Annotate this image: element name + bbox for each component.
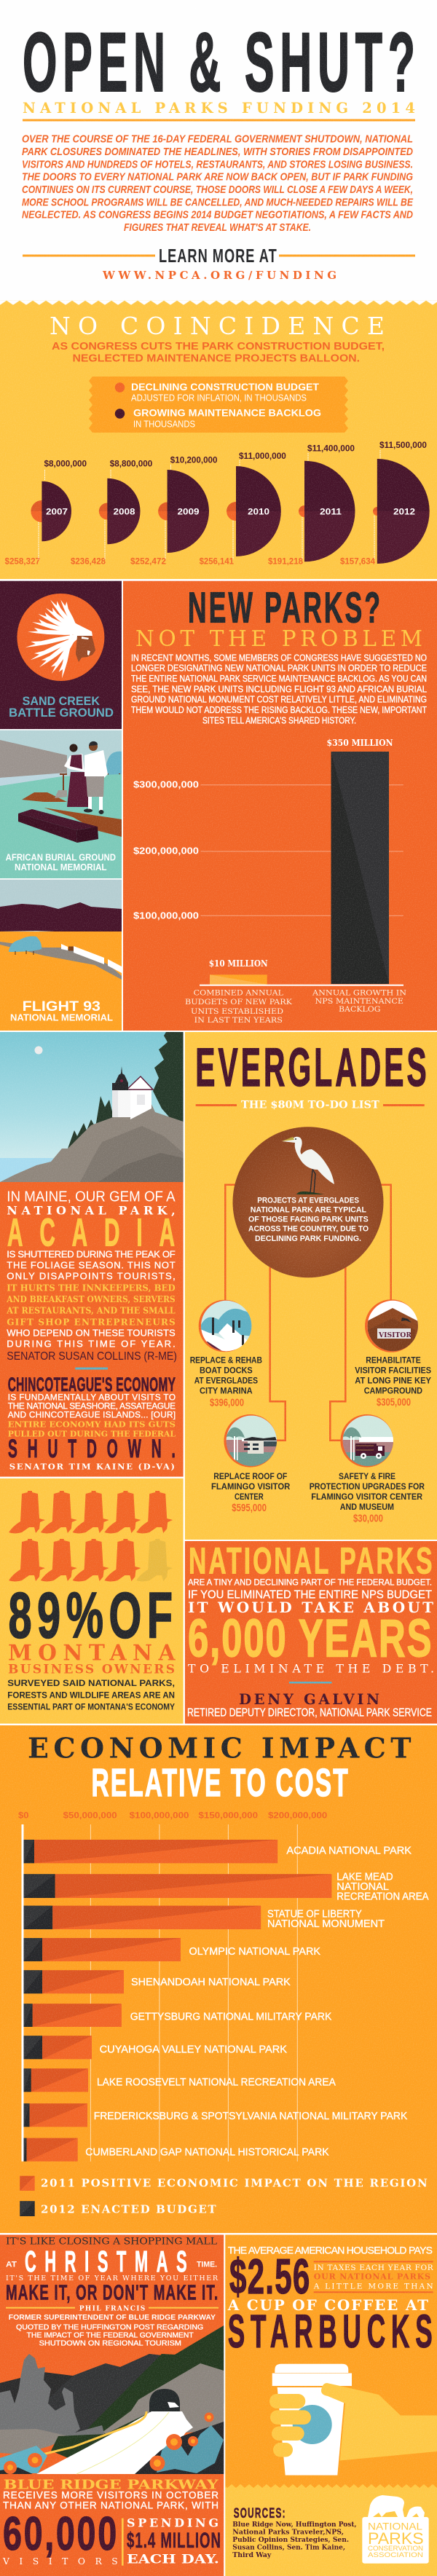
quote: phil francis: CHRISTMAS bbox=[25, 2245, 187, 2278]
quote: phil francis: THE IMPACT OF THE FEDERAL GOVERNMENT bbox=[27, 2331, 194, 2339]
quote: tim kaine: CHINCOTEAGUE'S ECONOMY bbox=[8, 1374, 176, 1395]
backlog value labels: $11,400,000 bbox=[307, 445, 355, 454]
caption left: BUDGETS OF NEW PARK bbox=[185, 998, 292, 1007]
panel: acadia scene bbox=[0, 1032, 184, 1182]
legend bbox=[20, 2176, 428, 2216]
illustration: tunnel road bbox=[0, 2325, 224, 2474]
memorial wall bbox=[61, 944, 122, 973]
project: roof bbox=[211, 1473, 291, 1514]
label bbox=[6, 853, 116, 873]
survey text: SURVEYED SAID NATIONAL PARKS, bbox=[7, 1679, 175, 1688]
budget value labels: $256,141 bbox=[200, 558, 235, 567]
legend ribbon bbox=[89, 377, 348, 433]
gridlines and axis labels bbox=[133, 779, 403, 921]
project: marina: AT EVERGLADES bbox=[194, 1377, 258, 1386]
bar: shenandoah bbox=[23, 1970, 291, 1993]
caption left bbox=[185, 989, 292, 1025]
legend ribbon: IN THOUSANDS bbox=[133, 420, 195, 430]
project: visitor facilities bbox=[355, 1357, 431, 1409]
panel: montana bbox=[0, 1478, 184, 1724]
panel: debt: TO ELIMINATE THE DEBT. bbox=[188, 1662, 434, 1676]
bar: acadia: ACADIA NATIONAL PARK bbox=[286, 1846, 412, 1857]
year labels: 2012 bbox=[393, 507, 415, 517]
project: marina bbox=[190, 1357, 262, 1409]
bar: gettysburg: GETTYSBURG NATIONAL MILITARY PARK bbox=[130, 2011, 332, 2022]
heading: EVERGLADES bbox=[195, 1037, 427, 1098]
axis labels: $50,000,000 bbox=[63, 1811, 117, 1821]
bar: statue of liberty: NATIONAL MONUMENT bbox=[267, 1918, 385, 1930]
quote: phil francis: QUOTED BY THE HUFFINGTON POST REGARDING bbox=[16, 2323, 204, 2331]
body text bbox=[131, 653, 427, 725]
starbucks word: STARBUCKS bbox=[228, 2305, 433, 2358]
quote: susan collins: AND BREAKFAST OWNERS, SERVERS bbox=[6, 1294, 176, 1304]
price note: A LITTLE MORE THAN bbox=[313, 2282, 433, 2291]
bar: statue of liberty: STATUE OF LIBERTY bbox=[267, 1909, 362, 1921]
blue ridge stats: THAN ANY OTHER NATIONAL PARK, WITH bbox=[3, 2500, 219, 2510]
price note: OUR NATIONAL PARKS bbox=[314, 2272, 430, 2281]
bar: lake mead: NATIONAL bbox=[336, 1881, 389, 1893]
water bbox=[0, 1158, 73, 1182]
circle text: PROJECTS AT EVERGLADES bbox=[257, 1197, 359, 1205]
lighthouse bbox=[112, 1066, 153, 1119]
road bbox=[0, 942, 122, 980]
connectors bbox=[225, 1185, 391, 1441]
project: roof: REPLACE ROOF OF bbox=[213, 1473, 287, 1481]
panel: sand creek bbox=[0, 581, 122, 729]
roadside plants left bbox=[0, 2446, 47, 2474]
panel: debt bbox=[185, 1541, 437, 1724]
section: no coincidence bbox=[0, 301, 437, 579]
business owners: BUSINESS OWNERS bbox=[8, 1662, 175, 1677]
project: visitor facilities: VISITOR FACILITIES bbox=[355, 1367, 431, 1376]
subtitle: NATIONAL PARKS FUNDING 2014 bbox=[23, 100, 415, 117]
project: marina: REPLACE & REHAB bbox=[190, 1357, 262, 1366]
quote: susan collins bbox=[6, 1189, 177, 1363]
panel: sources and logo bbox=[225, 2484, 437, 2576]
subheading: THE $80M TO-DO LIST bbox=[241, 1100, 379, 1111]
shovel bbox=[55, 774, 67, 798]
bar: fredericksburg: FREDERICKSBURG & SPOTSYLVANIA NATIONAL MILITARY PARK bbox=[94, 2111, 408, 2122]
quote: phil francis: AT bbox=[6, 2260, 17, 2269]
bar: statue of liberty bbox=[23, 1906, 385, 1930]
subheading: RELATIVE TO COST bbox=[92, 1760, 348, 1805]
quote: susan collins: IT HURTS THE INNKEEPERS, BED bbox=[7, 1283, 176, 1293]
panel: flight 93 bbox=[0, 880, 122, 1031]
sources: Blue Ridge Now, Huffington Post, bbox=[232, 2521, 357, 2529]
bar: cuyahoga bbox=[23, 2036, 287, 2059]
sources bbox=[232, 2505, 357, 2559]
main circle bbox=[233, 1127, 383, 1277]
survey text: FORESTS AND WILDLIFE AREAS ARE AN bbox=[7, 1691, 175, 1700]
heading: NATIONAL PARKS bbox=[189, 1541, 433, 1582]
rocks bbox=[0, 1103, 184, 1182]
quote: tim kaine: IS FUNDAMENTALLY ABOUT VISITS TO bbox=[8, 1392, 176, 1402]
quote: susan collins: DURING THIS TIME OF YEAR. bbox=[7, 1338, 176, 1349]
icon: fire truck bbox=[340, 1414, 395, 1468]
caption left: UNITS ESTABLISHED bbox=[191, 1007, 283, 1016]
panel: new parks bbox=[123, 581, 437, 1031]
logo: national parks conservation association bbox=[362, 2495, 429, 2564]
icon: visitor center: VISITOR bbox=[378, 1331, 412, 1339]
legend ribbon: DECLINING CONSTRUCTION BUDGET bbox=[131, 382, 320, 393]
project: fire safety: PROTECTION UPGRADES FOR bbox=[310, 1483, 425, 1492]
backlog bar: $350 MILLION bbox=[326, 737, 393, 748]
project: fire safety: FLAMINGO VISITOR CENTER bbox=[311, 1493, 423, 1502]
panel: blue ridge parkway bbox=[0, 2234, 224, 2576]
quote: phil francis: IT'S THE TIME OF YEAR WHERE YOU EITHER bbox=[6, 2274, 219, 2282]
guardrail bbox=[18, 2411, 146, 2460]
new parks bar: $10 MILLION bbox=[209, 958, 268, 969]
quote: tim kaine: AND CHINCOTEAGUE ISLANDS... [OUR] bbox=[8, 1410, 176, 1420]
quote: susan collins: ONLY DISAPPOINTS TOURISTS, bbox=[7, 1271, 176, 1282]
quote: susan collins: IS SHUTTERED DURING THE PEAK OF bbox=[7, 1249, 176, 1260]
budget value labels: $258,327 bbox=[4, 558, 40, 567]
subtitle rule bbox=[23, 119, 415, 121]
backlog bar bbox=[326, 737, 393, 984]
attribution: DENY GALVIN bbox=[239, 1691, 379, 1708]
bar: cumberland gap bbox=[23, 2138, 329, 2162]
quote: tim kaine: SENATOR TIM KAINE (D-VA) bbox=[9, 1461, 175, 1471]
quote: tim kaine: THE NATIONAL SEASHORE, ASSATEAGUE bbox=[8, 1401, 176, 1411]
legend: 2011 POSITIVE ECONOMIC IMPACT ON THE REGION bbox=[41, 2176, 428, 2189]
year labels: 2009 bbox=[178, 507, 200, 517]
quote: susan collins: GIFT SHOP ENTREPRENEURS bbox=[7, 1317, 176, 1328]
big percentage: 89%OF bbox=[9, 1579, 173, 1651]
year labels: 2011 bbox=[320, 507, 342, 517]
label: AFRICAN BURIAL GROUND bbox=[6, 853, 116, 863]
icon: egret bbox=[282, 1137, 334, 1194]
project: roof: CENTER bbox=[235, 1493, 264, 1502]
quote: phil francis: TIME. bbox=[197, 2260, 217, 2269]
budget value labels: $157,634 bbox=[340, 558, 376, 567]
axis labels: $200,000,000 bbox=[268, 1811, 328, 1821]
backlog value labels bbox=[44, 441, 427, 469]
subheading: NOT THE PROBLEM bbox=[135, 626, 422, 651]
label bbox=[9, 694, 114, 720]
label: BATTLE GROUND bbox=[9, 706, 114, 720]
quote: susan collins: IN MAINE, OUR GEM OF A bbox=[7, 1189, 176, 1205]
circle text: OF THOSE FACING PARK UNITS bbox=[248, 1216, 369, 1224]
maintenance backlog half circles bbox=[42, 459, 430, 564]
budget value labels: $252,472 bbox=[130, 558, 166, 567]
gridlines and axis labels: $300,000,000 bbox=[133, 779, 199, 790]
project: visitor facilities: AT LONG PINE KEY bbox=[355, 1377, 431, 1386]
axis labels: $0 bbox=[18, 1811, 29, 1821]
quote: phil francis: PHIL FRANCIS bbox=[79, 2305, 145, 2312]
project: marina: CITY MARINA bbox=[200, 1387, 253, 1396]
bar: olympic: OLYMPIC NATIONAL PARK bbox=[189, 1946, 320, 1958]
legend ribbon: ADJUSTED FOR INFLATION, IN THOUSANDS bbox=[131, 393, 307, 403]
label: NATIONAL MEMORIAL bbox=[10, 1012, 113, 1023]
budget value labels bbox=[4, 558, 376, 567]
price note: IN TAXES EACH YEAR FOR bbox=[314, 2264, 434, 2272]
icon: native american chief bbox=[17, 594, 104, 681]
caption right: BACKLOG bbox=[339, 1005, 380, 1014]
body text: SITES TELL AMERICA'S SHARED HISTORY. bbox=[202, 715, 356, 725]
project: roof: FLAMINGO VISITOR bbox=[211, 1483, 291, 1492]
survey text: ESSENTIAL PART OF MONTANA'S ECONOMY bbox=[7, 1703, 175, 1712]
backlog value labels: $8,800,000 bbox=[110, 460, 152, 469]
tall tree bbox=[153, 1032, 184, 1122]
year labels: 2007 bbox=[46, 507, 68, 517]
new parks bar bbox=[209, 958, 268, 985]
logo: national parks conservation association: PARKS bbox=[368, 2529, 424, 2548]
bar: lake mead bbox=[23, 1872, 429, 1902]
icon: flamingo visitor center roof bbox=[224, 1414, 278, 1468]
logo: national parks conservation association: ASSOCIATION bbox=[368, 2551, 423, 2559]
logo: national parks conservation association: NATIONAL bbox=[368, 2521, 422, 2532]
blue ridge stats: SPENDING bbox=[127, 2516, 219, 2529]
trees bbox=[0, 2354, 80, 2440]
backlog value labels: $11,500,000 bbox=[379, 441, 427, 450]
intro line: THE AVERAGE AMERICAN HOUSEHOLD PAYS bbox=[228, 2245, 433, 2256]
legend ribbon: GROWING MAINTENANCE BACKLOG bbox=[133, 408, 321, 419]
blue ridge stats bbox=[2, 2477, 221, 2567]
project: marina: BOAT DOCKS bbox=[200, 1367, 253, 1376]
caption left: IN LAST TEN YEARS bbox=[194, 1016, 283, 1025]
blue ridge stats: VISITORS bbox=[2, 2556, 118, 2567]
title: OPEN & SHUT? bbox=[23, 15, 415, 109]
blue ridge stats: RECEIVES MORE VISITORS IN OCTOBER bbox=[3, 2490, 219, 2501]
circle text: DECLINING PARK FUNDING. bbox=[255, 1234, 361, 1243]
caption right: ANNUAL GROWTH IN bbox=[312, 989, 406, 998]
quote: susan collins: ACADIA bbox=[7, 1211, 175, 1255]
budget value labels: $236,428 bbox=[71, 558, 106, 567]
backlog value labels: $8,000,000 bbox=[44, 460, 87, 469]
panel: acadia quote bbox=[0, 1182, 184, 1477]
axis labels bbox=[18, 1811, 328, 1821]
project: fire safety: AND MUSEUM bbox=[340, 1503, 394, 1512]
dirt mound bbox=[22, 792, 67, 802]
bar: lake mead: RECREATION AREA bbox=[336, 1891, 429, 1902]
small conifers bbox=[68, 1096, 114, 1149]
quote: phil francis bbox=[6, 2237, 219, 2348]
quote: tim kaine bbox=[8, 1374, 176, 1471]
label: SAND CREEK bbox=[23, 694, 101, 708]
bar: lake mead: LAKE MEAD bbox=[336, 1872, 393, 1883]
panel: african burial ground bbox=[0, 730, 122, 878]
bar: lake roosevelt: LAKE ROOSEVELT NATIONAL RECREATION AREA bbox=[97, 2076, 336, 2088]
axis labels: $150,000,000 bbox=[198, 1811, 258, 1821]
quote: tim kaine: ENTIRE ECONOMY HAD ITS GUTS bbox=[8, 1419, 176, 1430]
sources: Susan Collins, Sen. Tim Kaine, bbox=[232, 2544, 345, 2552]
panel: starbucks bbox=[225, 2234, 437, 2488]
roadside plants right bbox=[135, 2412, 224, 2474]
blue ridge stats: $1.4 MILLION bbox=[127, 2529, 221, 2553]
coffin bbox=[18, 809, 98, 843]
quote: phil francis: FORMER SUPERINTENDENT OF BLUE RIDGE PARKWAY bbox=[9, 2313, 216, 2322]
sources: Public Opinion Strategies, Sen. bbox=[232, 2536, 349, 2544]
icon: visitor center bbox=[365, 1299, 418, 1352]
backlog value labels: $10,200,000 bbox=[170, 456, 217, 465]
bar: gettysburg bbox=[23, 2004, 332, 2027]
blue ridge stats: BLUE RIDGE PARKWAY bbox=[4, 2477, 219, 2492]
heading: NO COINCIDENCE bbox=[50, 312, 385, 340]
heading: ECONOMIC IMPACT bbox=[28, 1731, 411, 1764]
legend: 2012 ENACTED BUDGET bbox=[41, 2202, 217, 2215]
half circle chart bbox=[4, 441, 430, 567]
project: roof: $595,000 bbox=[232, 1502, 267, 1514]
header section bbox=[22, 15, 415, 282]
body lines: ARE A TINY AND DECLINING PART OF THE FEDERAL BUDGET. bbox=[188, 1578, 432, 1588]
intro paragraph bbox=[22, 133, 414, 234]
bar: shenandoah: SHENANDOAH NATIONAL PARK bbox=[131, 1977, 291, 1988]
caption right bbox=[312, 989, 406, 1014]
axis labels: $100,000,000 bbox=[130, 1811, 189, 1821]
backlog value labels: $11,000,000 bbox=[239, 452, 286, 461]
price note bbox=[313, 2261, 434, 2293]
project: visitor facilities: REHABILITATE bbox=[366, 1357, 421, 1366]
circle text: ACROSS THE COUNTRY, DUE TO bbox=[248, 1225, 369, 1234]
construction budget circles bbox=[31, 500, 382, 522]
subheading bbox=[196, 1100, 425, 1111]
bar: fredericksburg bbox=[23, 2103, 408, 2127]
circle text bbox=[248, 1197, 369, 1243]
year labels: 2010 bbox=[248, 507, 269, 517]
horizontal bar chart bbox=[18, 1811, 429, 2162]
subheading: NEGLECTED MAINTENANCE PROJECTS BALLOON. bbox=[73, 353, 360, 365]
icon: hand holding coffee cup bbox=[269, 2364, 437, 2475]
project: marina: $396,000 bbox=[210, 1397, 244, 1409]
bar: olympic bbox=[23, 1938, 320, 1961]
quote: susan collins: THE FOLIAGE SEASON. THIS NOT bbox=[7, 1260, 176, 1271]
quote: phil francis: IT'S LIKE CLOSING A SHOPPING MALL bbox=[6, 2237, 217, 2248]
gridlines and axis labels: $100,000,000 bbox=[133, 910, 199, 921]
big price: $2.56 bbox=[229, 2249, 310, 2304]
project: fire safety bbox=[310, 1473, 425, 1524]
logo: national parks conservation association: CONSERVATION bbox=[368, 2545, 423, 2552]
bar: cuyahoga: CUYAHOGA VALLEY NATIONAL PARK bbox=[100, 2044, 287, 2055]
label: NATIONAL MEMORIAL bbox=[15, 862, 107, 873]
caption left: COMBINED ANNUAL bbox=[194, 989, 283, 998]
budget value labels: $191,218 bbox=[268, 558, 304, 567]
sources: National Parks Traveler,NPS, bbox=[232, 2528, 344, 2536]
panel: debt: IT WOULD TAKE ABOUT bbox=[188, 1599, 433, 1616]
heading: NEW PARKS? bbox=[188, 584, 380, 632]
quote: susan collins: AT RESTAURANTS, AND THE SMALL bbox=[6, 1306, 176, 1316]
learn more line: LEARN MORE AT bbox=[159, 245, 277, 267]
blue ridge stats: 60,000 bbox=[3, 2508, 117, 2561]
trees bbox=[9, 937, 42, 955]
coffee line: A CUP OF COFFEE AT bbox=[227, 2296, 428, 2314]
bar: lake roosevelt bbox=[23, 2068, 336, 2092]
sources: Third Way bbox=[232, 2551, 272, 2559]
quote: susan collins: NATIONAL PARK, bbox=[7, 1204, 176, 1218]
mourners bbox=[64, 741, 108, 814]
montana heading: MONTANA bbox=[8, 1639, 176, 1665]
bar chart bbox=[133, 737, 406, 1025]
leader lines bbox=[39, 450, 380, 559]
intro paragraph: FIGURES THAT REVEAL WHAT'S AT STAKE. bbox=[124, 221, 311, 234]
year labels bbox=[46, 507, 415, 517]
bar: cumberland gap: CUMBERLAND GAP NATIONAL HISTORICAL PARK bbox=[85, 2146, 329, 2158]
quote: phil francis: MAKE IT, OR DON'T MAKE IT. bbox=[6, 2281, 218, 2304]
sources: SOURCES: bbox=[234, 2505, 286, 2521]
survey text bbox=[7, 1679, 175, 1712]
subheading bbox=[52, 341, 385, 365]
caption right: NPS MAINTENANCE bbox=[315, 997, 403, 1006]
label bbox=[10, 999, 113, 1023]
url: WWW.NPCA.ORG/FUNDING bbox=[102, 269, 336, 282]
quote: tim kaine: PULLED OUT DURING THE FEDERAL bbox=[8, 1428, 176, 1438]
quote: susan collins: WHO DEPEND ON THESE TOURISTS bbox=[7, 1327, 176, 1338]
road bbox=[36, 2411, 193, 2474]
panel: everglades bbox=[185, 1032, 437, 1540]
quote: phil francis: SHUTDOWN ON REGIONAL TOURISM bbox=[39, 2340, 181, 2348]
panel: economic impact bbox=[0, 1725, 437, 2233]
gridlines and axis labels: $200,000,000 bbox=[133, 846, 199, 856]
quote: tim kaine: SHUTDOWN. bbox=[8, 1434, 176, 1463]
year labels: 2008 bbox=[114, 507, 135, 517]
big figure: 6,000 YEARS bbox=[188, 1609, 432, 1669]
project: visitor facilities: CAMPGROUND bbox=[364, 1387, 422, 1396]
project: fire safety: $30,000 bbox=[353, 1512, 383, 1524]
quote: susan collins: SENATOR SUSAN COLLINS (R-ME) bbox=[7, 1350, 177, 1363]
boots icon chart bbox=[9, 1491, 173, 1582]
moon bbox=[35, 1046, 42, 1055]
project: fire safety: SAFETY & FIRE bbox=[339, 1473, 395, 1481]
subheading: AS CONGRESS CUTS THE PARK CONSTRUCTION BUDGET, bbox=[52, 341, 385, 352]
circle text: NATIONAL PARK ARE TYPICAL bbox=[251, 1206, 366, 1215]
project: visitor facilities: $305,000 bbox=[377, 1396, 411, 1409]
icon: marina bbox=[198, 1299, 252, 1352]
blue ridge stats: EACH DAY. bbox=[127, 2552, 219, 2567]
learn more line bbox=[23, 245, 415, 267]
bar: acadia bbox=[23, 1840, 412, 1863]
label: FLIGHT 93 bbox=[23, 999, 101, 1015]
tunnel bbox=[149, 2389, 180, 2412]
